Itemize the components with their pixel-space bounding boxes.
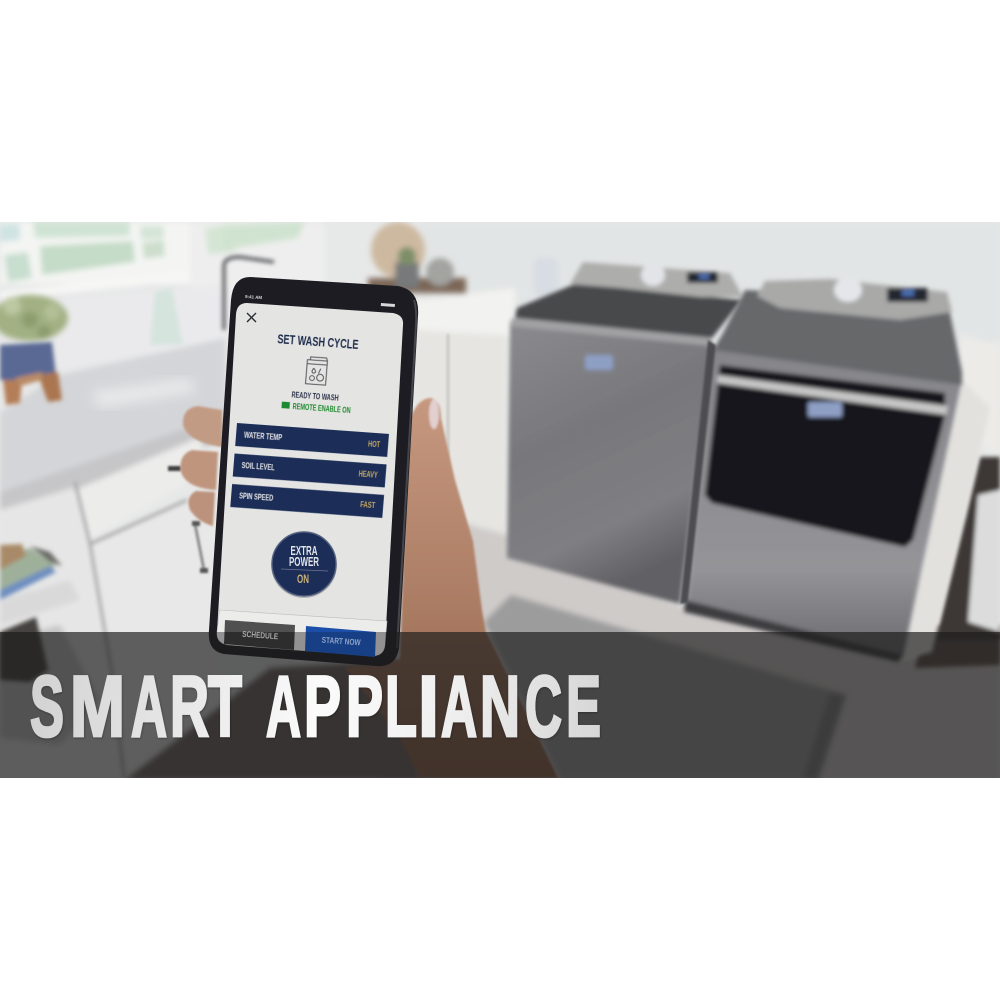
phone xyxy=(209,277,418,666)
dryer top xyxy=(713,290,962,385)
setting: water temp xyxy=(235,423,389,457)
phone status bar xyxy=(245,294,395,307)
title: L xyxy=(385,659,417,755)
setting: soil level: SOIL LEVEL xyxy=(241,461,275,472)
title: E xyxy=(566,659,601,755)
laundry basket xyxy=(935,457,1000,640)
cabinet handles xyxy=(168,466,208,573)
title: A xyxy=(266,659,301,755)
washer front xyxy=(507,322,712,604)
counter highlight xyxy=(90,378,195,408)
faucet and bottle xyxy=(150,257,274,345)
remote enable status: REMOTE ENABLE ON xyxy=(292,402,351,415)
title: T xyxy=(208,659,242,755)
remote enable status xyxy=(281,401,351,415)
extra power button xyxy=(271,532,337,598)
extra power button: ON xyxy=(297,572,309,586)
dryer door xyxy=(705,365,945,547)
dark floor xyxy=(125,660,422,780)
dryer base xyxy=(684,600,903,662)
right counter and cabinets xyxy=(418,292,512,334)
dryer handle xyxy=(717,375,948,415)
plant pot xyxy=(0,295,68,405)
books on shelf xyxy=(0,544,62,600)
finger two xyxy=(180,450,218,490)
screen content xyxy=(230,330,396,518)
title: A xyxy=(131,659,167,755)
dryer xyxy=(684,278,962,662)
title: S xyxy=(30,659,64,755)
divider between washer and dryer xyxy=(680,340,716,604)
ready status: READY TO WASH xyxy=(291,390,339,403)
title: A xyxy=(441,659,477,755)
schedule button: SCHEDULE xyxy=(242,629,279,641)
extra power button: POWER xyxy=(289,554,319,569)
washer console xyxy=(570,262,743,297)
extra power button: EXTRA xyxy=(290,543,318,558)
title: M xyxy=(70,659,125,755)
palm and wrist xyxy=(345,398,558,778)
title: N xyxy=(480,659,520,755)
title: P xyxy=(346,659,383,755)
window xyxy=(0,222,303,298)
dryer logo xyxy=(808,402,842,417)
schedule button xyxy=(224,620,295,650)
hand xyxy=(180,398,558,778)
floor xyxy=(396,523,998,778)
title: R xyxy=(170,659,209,755)
setting: water temp: WATER TEMP xyxy=(244,431,282,442)
phone status bar: 9:41 AM xyxy=(245,294,263,300)
washer logo xyxy=(585,355,613,370)
close icon xyxy=(247,313,256,322)
phone screen xyxy=(217,303,403,656)
dark gap by the wall xyxy=(915,625,1000,668)
floor rug xyxy=(484,595,846,780)
screen footer xyxy=(217,610,387,656)
thumb nail xyxy=(429,399,439,429)
washer lid xyxy=(515,283,742,338)
dryer console xyxy=(757,279,952,320)
screen heading: SET WASH CYCLE xyxy=(277,332,359,352)
dark title band xyxy=(0,632,1000,778)
dryer front xyxy=(687,347,962,657)
setting: spin speed: FAST xyxy=(360,500,376,510)
title: P xyxy=(304,659,341,755)
photo: laundry room scene xyxy=(0,222,1000,780)
setting: water temp: HOT xyxy=(368,440,381,449)
setting: soil level xyxy=(233,454,387,487)
cabinet edges xyxy=(75,482,187,778)
finger one xyxy=(183,406,222,447)
title: I xyxy=(418,659,439,755)
start now button xyxy=(305,626,376,657)
title: C xyxy=(525,659,562,755)
icon: washer xyxy=(306,357,328,385)
washer xyxy=(507,262,743,604)
left counter and cabinets xyxy=(0,340,226,743)
setting: spin speed: SPIN SPEED xyxy=(239,492,274,503)
phone body xyxy=(209,277,418,666)
white pillar beside dryer xyxy=(912,386,988,658)
background wall xyxy=(0,222,1000,630)
setting: soil level: HEAVY xyxy=(358,470,379,480)
start now button: START NOW xyxy=(321,635,362,647)
phone screen under band xyxy=(217,632,386,656)
dark basket xyxy=(0,617,48,682)
setting: spin speed xyxy=(230,484,384,518)
shelf decor xyxy=(368,222,558,296)
finger three xyxy=(188,491,215,526)
